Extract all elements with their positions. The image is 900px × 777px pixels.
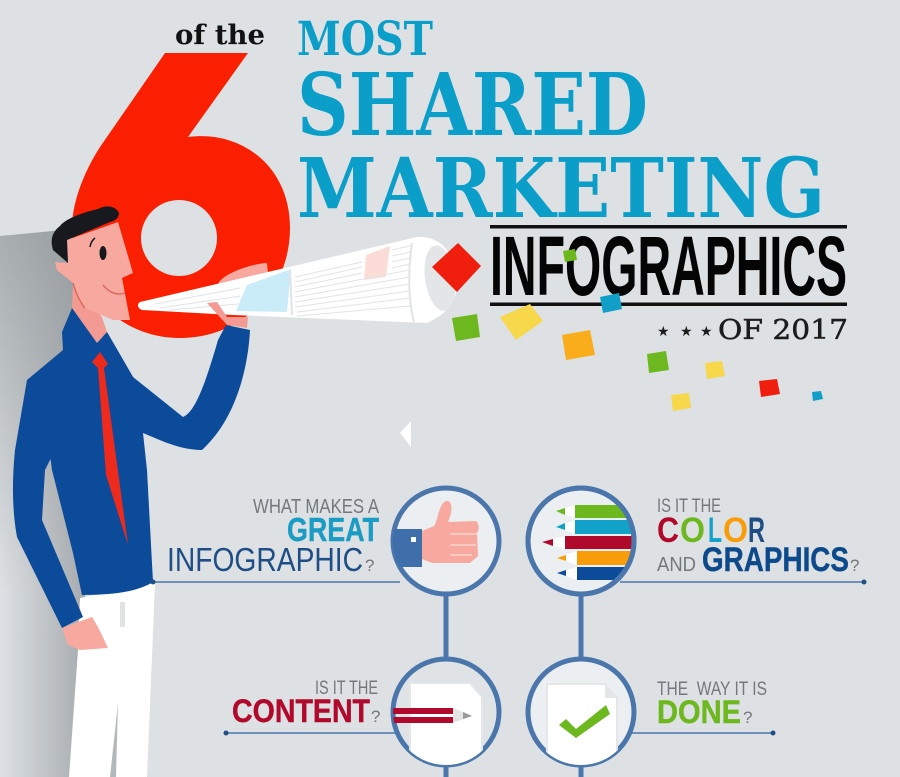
- text: is it the color and graphics: AND: [657, 554, 696, 576]
- shirt torso: [48, 308, 153, 595]
- heading: MOST SHARED MARKETING: [297, 12, 825, 237]
- text: is it the color and graphics: IS IT THE: [657, 496, 721, 517]
- text: is it the color and graphics: GRAPHICS: [702, 541, 849, 579]
- icon: coloured pencils: [528, 488, 637, 594]
- icon: document and check mark: [528, 659, 634, 770]
- text: what makes a great infographic: GREAT: [287, 511, 379, 548]
- necktie: [92, 352, 128, 545]
- text: is it the color and graphics: L: [708, 511, 722, 550]
- text: is it the color and graphics: C: [657, 511, 679, 550]
- text: the way it is done: THE WAY IT IS: [657, 679, 767, 700]
- subheading: of 2017: ★★★: [657, 323, 713, 339]
- text: is it the content: CONTENT: [232, 693, 370, 729]
- panel: color and graphics: [528, 488, 859, 594]
- icon: red diamond: [432, 243, 481, 292]
- subheading: of 2017: [657, 315, 848, 346]
- panel: content: [232, 659, 499, 770]
- text: is it the content: [232, 678, 380, 729]
- icon: thumbs up: [392, 488, 499, 594]
- hanging arm: [13, 350, 83, 628]
- newspaper pink patch: [364, 246, 390, 280]
- newspaper blue patch: [236, 269, 291, 312]
- subheading: of 2017: OF 2017: [718, 315, 848, 346]
- face: [55, 222, 133, 320]
- heading: MOST SHARED MARKETING: SHARED: [297, 55, 648, 156]
- text: is it the color and graphics: ?: [850, 556, 859, 575]
- raised arm: [107, 325, 250, 450]
- text: the way it is done: ?: [743, 708, 752, 727]
- hand on top of telescope: [218, 263, 268, 292]
- big red number 6: [72, 53, 290, 338]
- panel: done: [528, 659, 767, 770]
- icon: document and pencil: [392, 659, 499, 770]
- text: is it the content: ?: [371, 707, 380, 726]
- heading: MOST SHARED MARKETING: MARKETING: [297, 141, 825, 237]
- text: the way it is done: [657, 679, 767, 730]
- lower fingers: [207, 302, 248, 328]
- neck: [72, 283, 107, 346]
- confetti squares: [452, 249, 823, 411]
- text: what makes a great infographic: INFOGRAPHIC: [167, 541, 363, 578]
- text: is it the color and graphics: O: [680, 511, 705, 550]
- trousers: [69, 583, 155, 777]
- hair: [52, 206, 119, 263]
- hand at side: [62, 617, 108, 650]
- leader lines with dots: [150, 580, 866, 736]
- panel: great infographic: [167, 488, 499, 594]
- text: what makes a great infographic: ?: [365, 556, 374, 575]
- heading: of the: of the: [175, 20, 265, 51]
- text: is it the content: IS IT THE: [315, 678, 378, 699]
- heading: MOST SHARED MARKETING: MOST: [297, 12, 433, 67]
- text: what makes a great infographic: WHAT MAKES A: [253, 496, 380, 518]
- eye and smile: [100, 246, 106, 260]
- connector lines: [444, 590, 584, 777]
- text: is it the color and graphics: R: [748, 511, 765, 550]
- illustration: man with newspaper telescope: [13, 206, 459, 777]
- text: is it the color and graphics: [657, 496, 859, 579]
- text: what makes a great infographic: [167, 496, 380, 578]
- icon: small white shard: [400, 421, 411, 447]
- rolled newspaper telescope: [138, 237, 457, 323]
- text: is it the color and graphics: O: [723, 511, 748, 550]
- telescope mouth: [421, 243, 459, 313]
- text: the way it is done: DONE: [657, 694, 741, 730]
